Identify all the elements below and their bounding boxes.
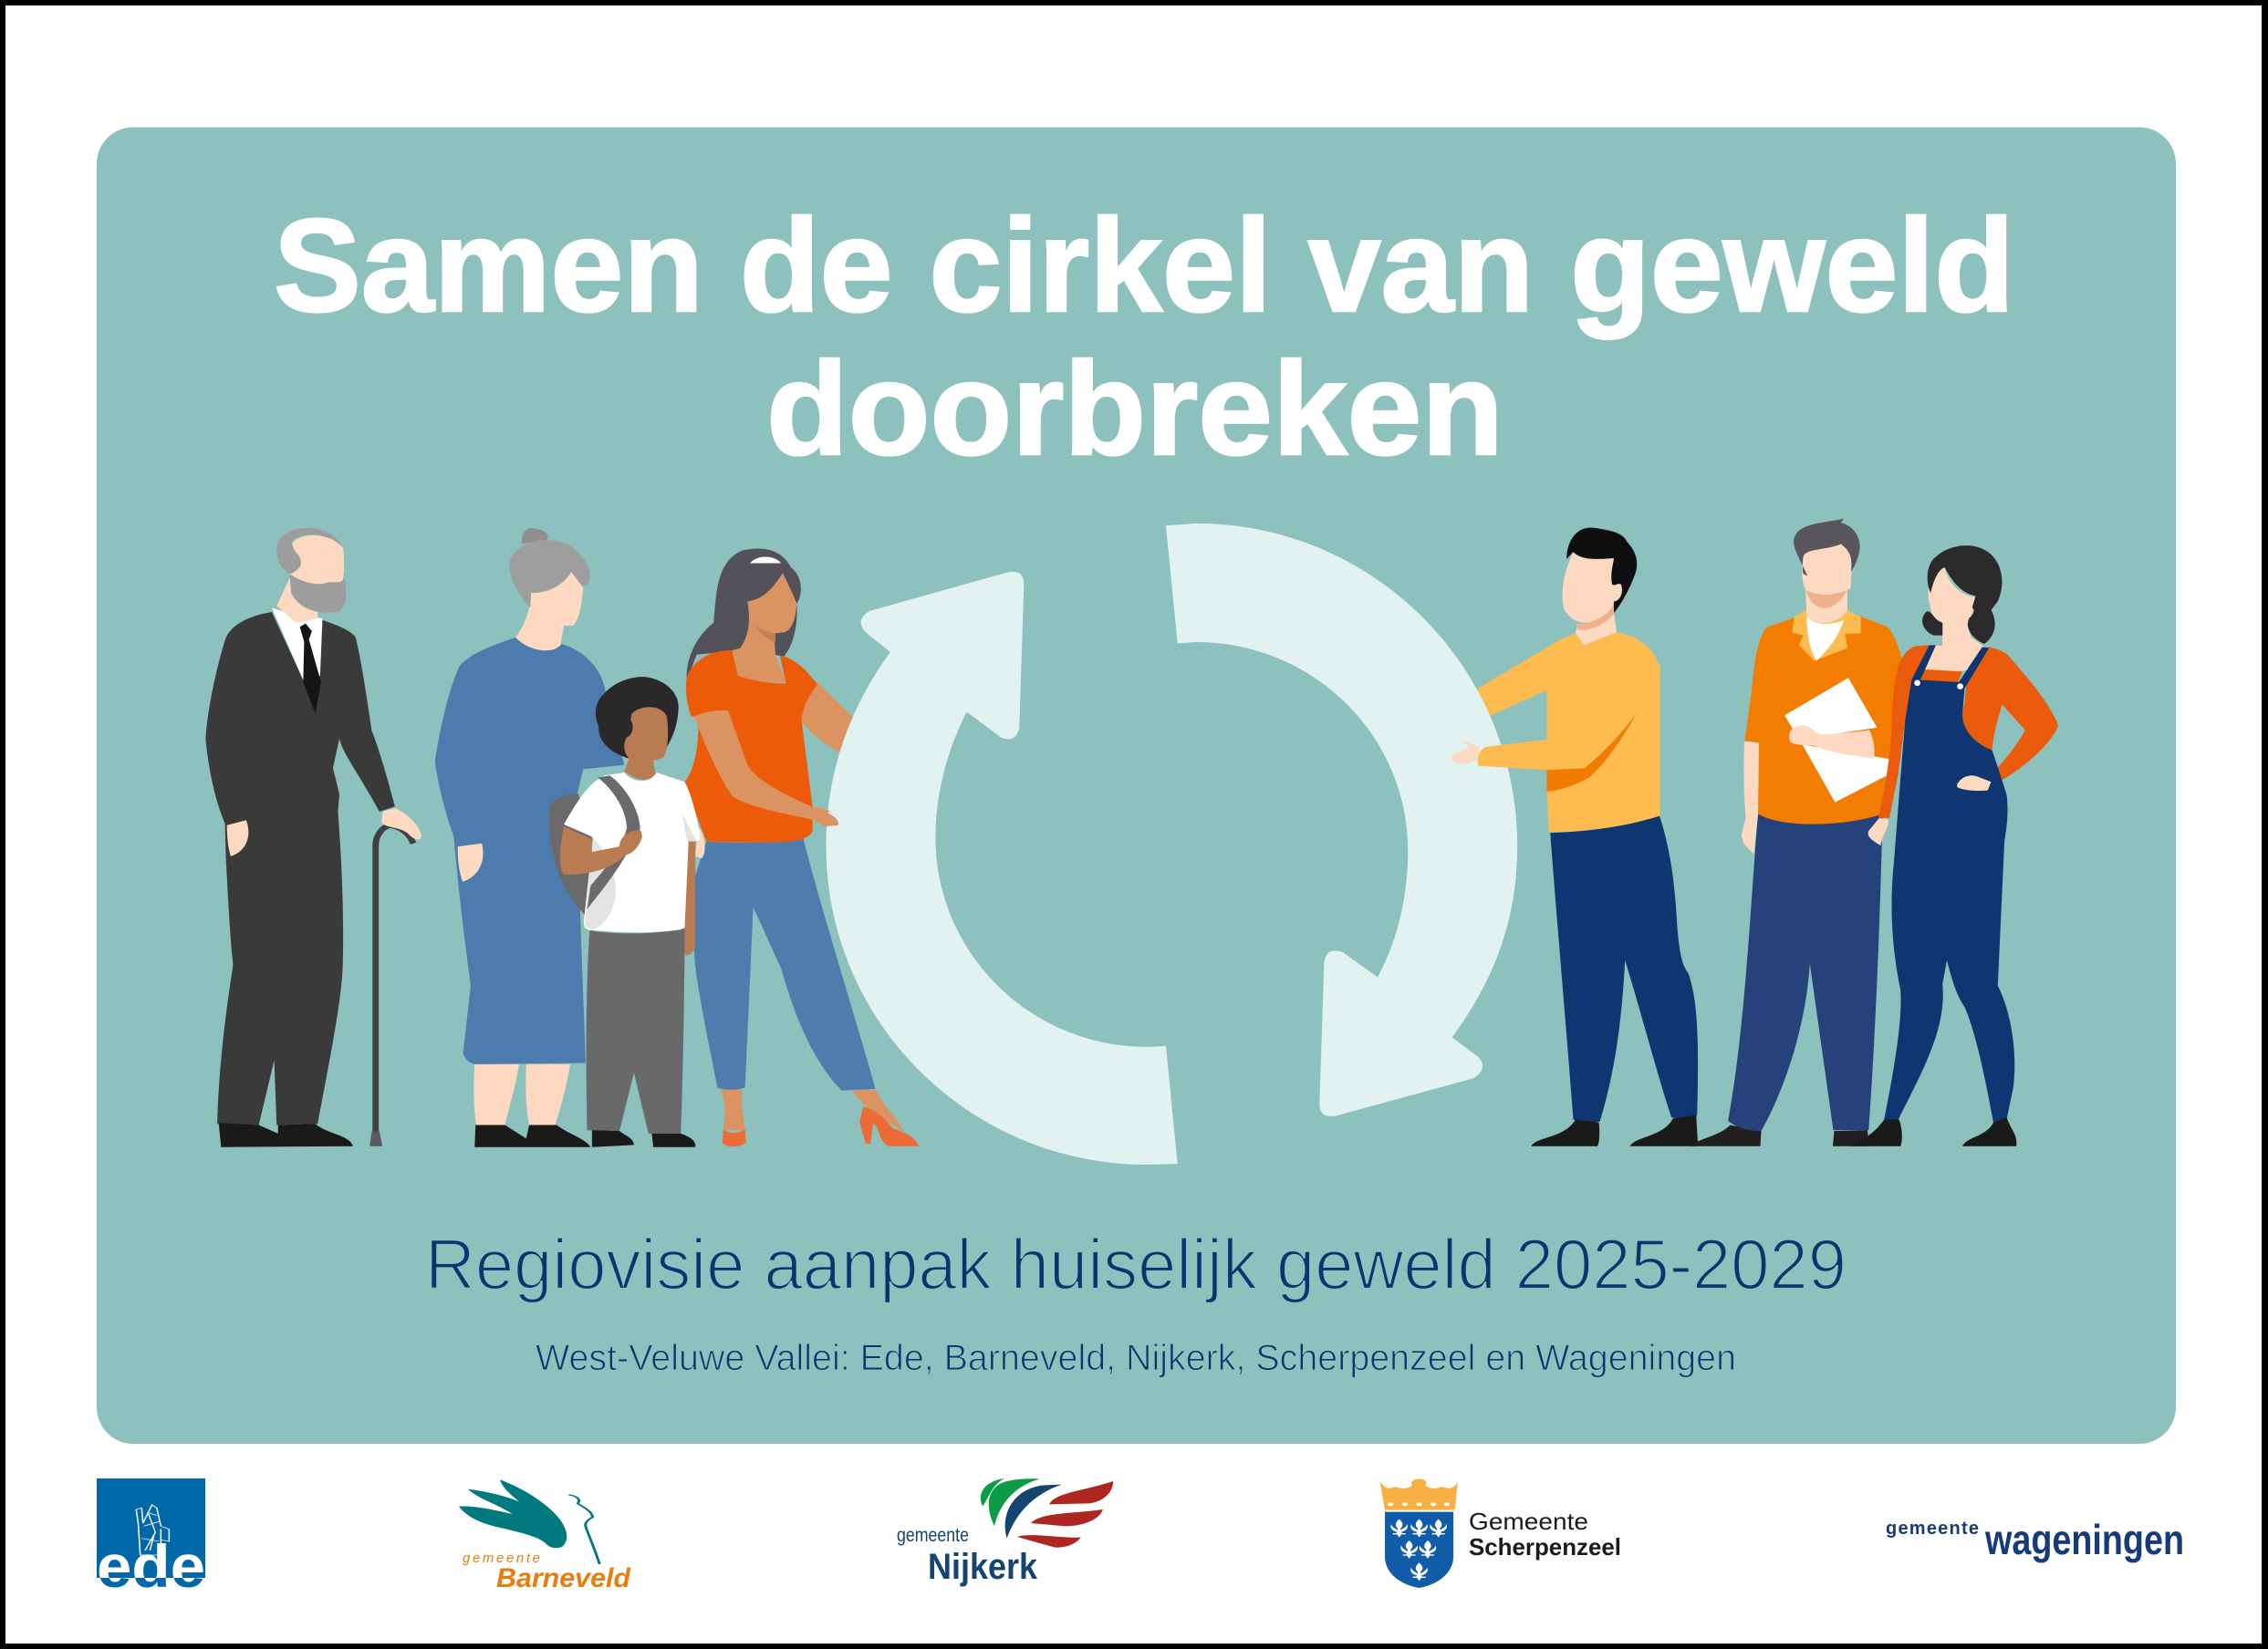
logo: Ede: ede [97, 1532, 205, 1600]
person: woman in overalls [1849, 545, 2058, 1146]
title [274, 192, 2014, 482]
title: Samen de cirkel van geweld [274, 192, 2014, 339]
person: boy with backpack [549, 677, 700, 1147]
logo: Nijkerk [897, 1478, 1113, 1587]
logo: Scherpenzeel [1380, 1479, 1621, 1588]
far arm of the man in yellow behind the arrows [1470, 639, 1560, 718]
region line: West-Veluwe Vallei: Ede, Barneveld, Nijkerk, Scherpenzeel en Wageningen [536, 1338, 1736, 1378]
logo: Barneveld: Barneveld [496, 1563, 631, 1593]
logo: Ede: ede [97, 1532, 205, 1600]
logo: Nijkerk: Nijkerk [928, 1547, 1038, 1587]
logo: Barneveld [459, 1479, 631, 1593]
person: woman in orange top [684, 549, 919, 1146]
person: grandmother in blue dress [435, 528, 624, 1147]
far arm of the woman behind the arrows [801, 682, 856, 754]
subtitle: Regiovisie aanpak huiselijk geweld 2025-2029 [425, 1224, 1847, 1304]
logo: Wageningen: wageningen [1984, 1516, 2184, 1563]
cycle arrows [827, 524, 1517, 1165]
logo: Nijkerk: gemeente [897, 1525, 969, 1546]
people group: right [1451, 519, 2058, 1146]
person: old man with cane [205, 528, 421, 1147]
arrow: clockwise right [1166, 524, 1517, 1116]
person: man with papers [1691, 519, 1903, 1146]
logo: Wageningen: gemeente [1886, 1519, 1979, 1539]
logo: Scherpenzeel: Gemeente [1469, 1508, 1588, 1535]
people group: left [205, 528, 919, 1147]
logo: Wageningen [1886, 1516, 2184, 1563]
panel: teal background [97, 128, 2176, 1444]
logo: Ede [97, 1478, 205, 1587]
arrow: clockwise left [827, 572, 1178, 1165]
logo: Scherpenzeel: Scherpenzeel [1469, 1533, 1621, 1561]
title: doorbreken [766, 335, 1503, 482]
person: man in yellow sweater [1451, 527, 1698, 1146]
logo: Barneveld: gemeente [463, 1550, 540, 1566]
